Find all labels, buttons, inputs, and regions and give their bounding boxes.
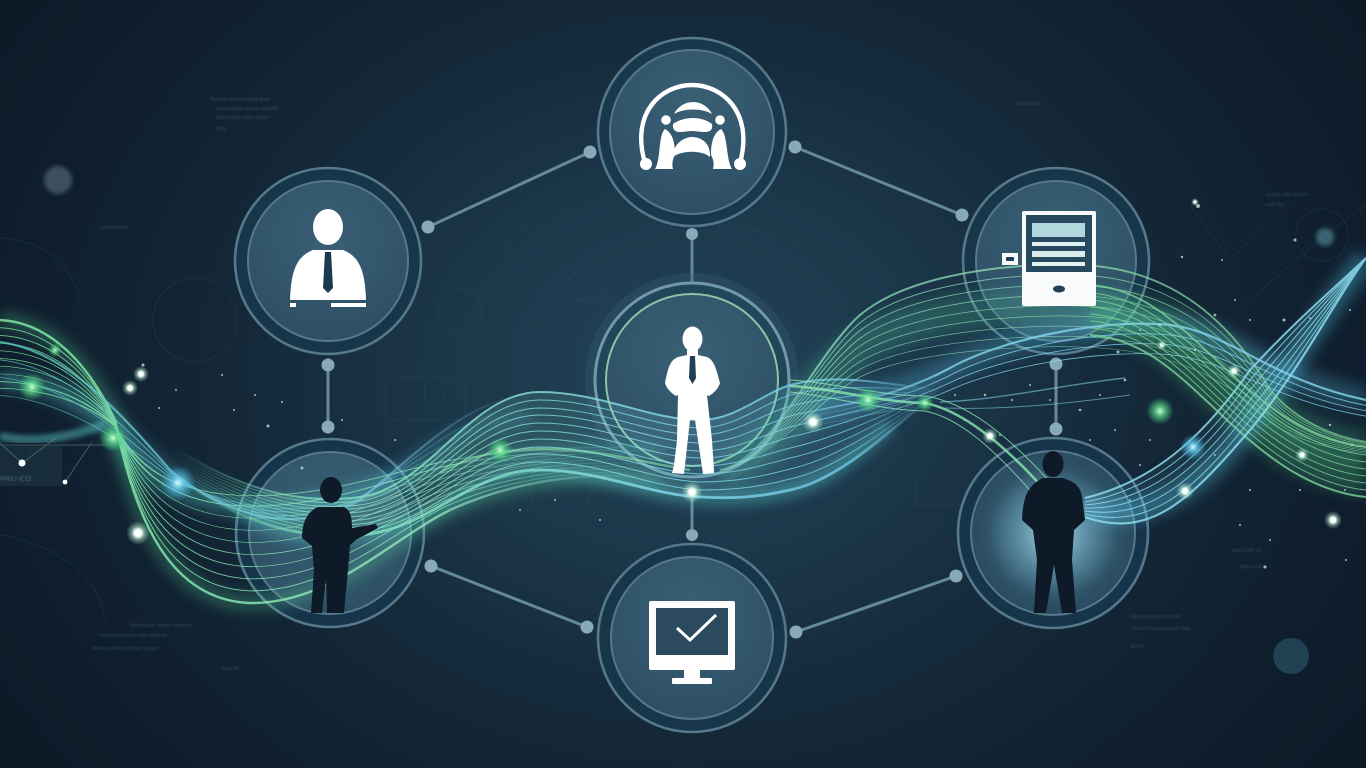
faint background captions: system data stream: [1265, 192, 1309, 198]
ribbon glow: [0, 258, 1366, 603]
flowing data ribbons: [0, 258, 1366, 603]
connector nodes: [322, 140, 1062, 638]
faint background captions: Information flow across: [1130, 614, 1182, 620]
faint background captions: signal value: [1240, 564, 1267, 570]
figure: white standing person, centre: [665, 326, 720, 474]
glowing nodes on the ribbons: [18, 166, 1342, 674]
faint background captions: linked team data stream: [216, 115, 269, 121]
faint background captions: connections across systems: [216, 106, 279, 112]
node: right ring: [963, 168, 1149, 354]
faint background captions: network data: [100, 225, 129, 231]
ribbon: green right: [720, 264, 1366, 470]
ribbon: green highlight strand: [440, 380, 1052, 496]
faint background captions: record: [1130, 644, 1144, 650]
ribbon: green lower right: [1090, 285, 1366, 497]
ribbon: central band translucent fill: [170, 379, 940, 536]
faint background captions: data file: [222, 666, 240, 672]
faint background captions: node list: [1265, 202, 1284, 208]
faint background captions: linked workflow of data values: [92, 646, 159, 652]
faint background captions: data: [216, 126, 226, 132]
node: bottom left ring: [236, 439, 424, 627]
ribbon: blue left: [0, 342, 530, 519]
icon: network arch: [640, 85, 746, 170]
icon: businessman bust: [290, 209, 366, 307]
faint background captions: Information shared between: [130, 623, 192, 629]
faint background captions: PRIU ICO: [0, 476, 32, 483]
node: top centre, network arch icon: [598, 38, 786, 226]
figure: standing silhouette, bottom right: [1022, 451, 1085, 613]
node: bottom centre, monitor check icon: [598, 544, 786, 732]
node: bottom right ring with spotlight: [958, 438, 1148, 628]
faint background captions: [0, 97, 1309, 672]
figure: presenter silhouette, bottom left: [302, 477, 378, 613]
node: left, businessman bust icon: [235, 168, 421, 354]
icon: monitor with check mark: [649, 601, 735, 684]
faint background captions: connected people and systems: [98, 633, 167, 639]
node: centre ring: [585, 273, 799, 487]
faint background captions: signal data: [1015, 101, 1039, 107]
document terminal icon, right node: [1002, 211, 1096, 306]
faint background technical sketches: [0, 200, 1366, 620]
faint background captions: data node list: [1232, 548, 1262, 554]
faint chart panel at left edge: [0, 438, 110, 486]
star particles: [142, 204, 1353, 568]
ribbon: central band lines: [170, 379, 940, 536]
faint background captions: connected people and data: [1130, 626, 1191, 632]
faint background captions: Process data network flows: [210, 97, 271, 103]
ribbon: blue rising right: [1085, 258, 1366, 524]
ribbon: green left: [0, 320, 660, 603]
connector lines: [328, 147, 1056, 632]
ribbon: left edge blue tail: [0, 424, 105, 440]
ribbon: blue right: [800, 324, 1366, 428]
